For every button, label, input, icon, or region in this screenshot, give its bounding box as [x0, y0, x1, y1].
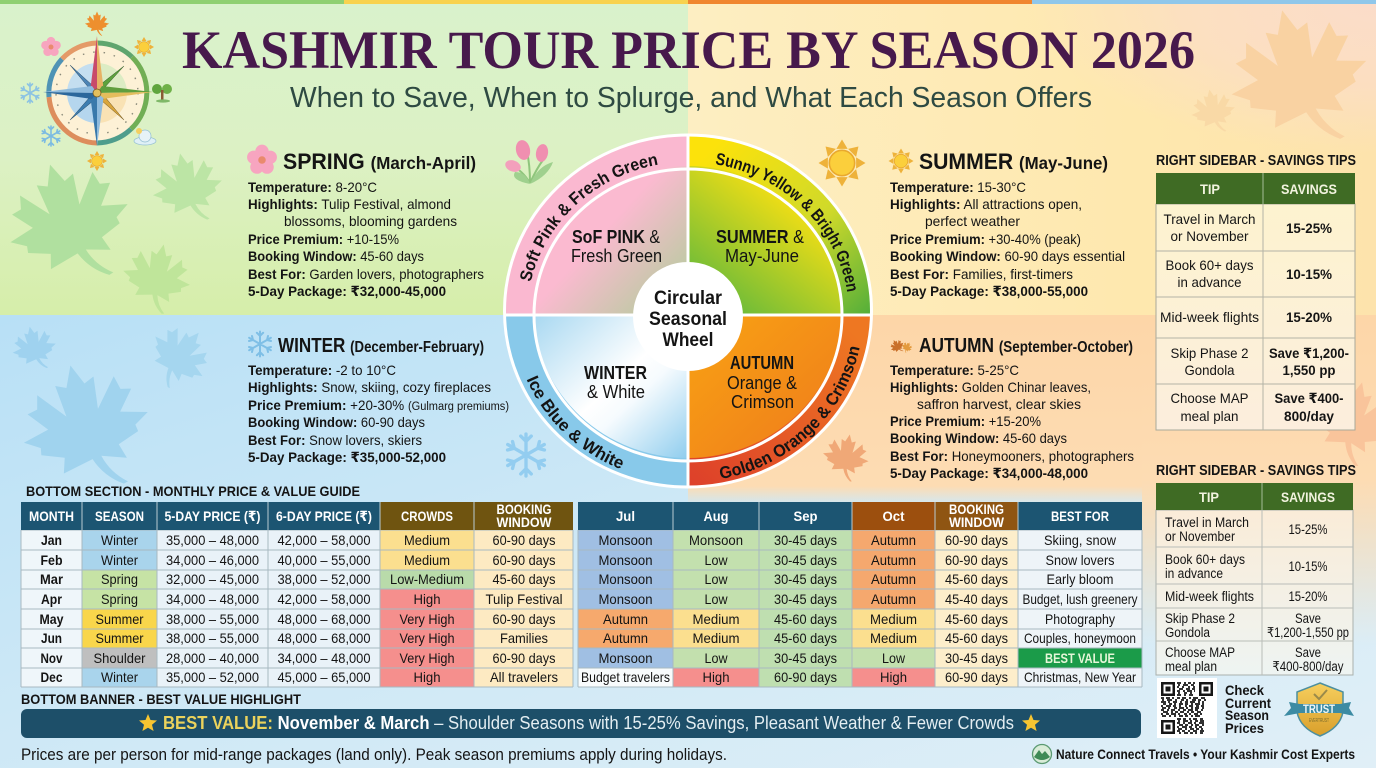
panel: summer: Price Premium: +30-40% (peak) — [890, 231, 1081, 247]
Jul column: Monsoon — [598, 650, 652, 666]
savings values: Save — [1295, 611, 1321, 626]
tip: choose map meal plan — [1170, 390, 1344, 424]
table header: WINDOW — [496, 514, 552, 530]
booking window column: 60-90 days — [945, 552, 1008, 568]
Jul column: Monsoon — [598, 571, 652, 587]
Oct column: Medium — [870, 611, 917, 627]
icon: nature connect logo — [1032, 744, 1052, 764]
tip: skip phase 2 gondola: Skip Phase 2 — [1170, 345, 1249, 361]
summer heading: SUMMER (May-June) — [919, 149, 1108, 174]
Aug column — [689, 532, 743, 685]
table header: Jul — [616, 508, 635, 524]
sidebar table header — [1156, 173, 1355, 204]
tip: choose map meal plan: Choose MAP — [1170, 390, 1248, 406]
tip: mid-week flights: Mid-week flights — [1160, 309, 1259, 325]
Oct column — [870, 532, 917, 685]
5-day price column — [166, 532, 259, 685]
booking window column: 60-90 days — [492, 611, 556, 627]
Sep column: 30-45 days — [774, 650, 837, 666]
Sep column: 45-60 days — [774, 611, 837, 627]
panel: autumn — [887, 335, 1134, 481]
panel: autumn: Best For: Honeymooners, photographers — [890, 448, 1134, 464]
tip: book in advance — [1166, 257, 1333, 290]
title: KASHMIR TOUR PRICE BY SEASON 2026 — [182, 20, 1195, 80]
spring heading: SPRING (March-April) — [283, 149, 476, 174]
Oct column: High — [880, 669, 907, 685]
6-day price column: 42,000 – 58,000 — [278, 591, 371, 607]
5-day price column: 28,000 – 40,000 — [166, 650, 259, 666]
tip rows: meal plan — [1165, 659, 1217, 674]
Jul column: Monsoon — [598, 552, 652, 568]
spring quadrant label — [571, 227, 662, 266]
best for column: BEST VALUE — [1045, 650, 1115, 666]
Aug column: Monsoon — [689, 532, 743, 548]
tip rows — [1165, 515, 1254, 674]
tip: travel in march or november: Travel in March — [1164, 211, 1256, 227]
Oct column: Low — [882, 650, 906, 666]
table: savings tips compact — [1156, 483, 1353, 675]
trust badge: EVERTRUST — [1309, 718, 1329, 724]
tip: travel in march or november — [1164, 211, 1333, 244]
table header: 6-DAY PRICE (₹) — [276, 508, 372, 524]
5-day price column: 35,000 – 52,000 — [166, 669, 259, 685]
panel: spring: Temperature: 8-20°C — [248, 179, 377, 195]
panel: autumn: Temperature: 5-25°C — [890, 362, 1019, 378]
table header: Sep — [794, 508, 818, 524]
booking window column: 45-60 days — [945, 611, 1008, 627]
icon: sun — [818, 140, 866, 186]
season column: Spring — [101, 591, 138, 607]
winter outer ring — [504, 315, 688, 487]
spring quadrant label: Fresh Green — [571, 246, 662, 266]
6-day price column: 40,000 – 55,000 — [278, 552, 371, 568]
season column: Winter — [101, 552, 138, 568]
panel: winter: Best For: Snow lovers, skiers — [248, 432, 422, 448]
Oct column: Autumn — [871, 571, 916, 587]
month column: Apr — [41, 591, 62, 607]
table header: Aug — [704, 508, 728, 524]
tip rows: Book 60+ days — [1165, 552, 1245, 567]
season column — [94, 532, 146, 685]
5-day price column: 38,000 – 55,000 — [166, 630, 259, 646]
autumn quadrant label — [727, 353, 797, 412]
Oct column: Autumn — [871, 552, 916, 568]
booking window column: Families — [500, 630, 548, 646]
spring outer ring — [504, 135, 688, 315]
panel: winter: Highlights: Snow, skiing, cozy fireplaces — [248, 379, 491, 395]
icon: snowflake — [508, 434, 544, 476]
table header: BOOKING — [496, 501, 552, 517]
savings values: 10-15% — [1288, 559, 1328, 574]
sidebar table header: SAVINGS — [1281, 181, 1337, 197]
panel: winter: Temperature: -2 to 10°C — [248, 362, 396, 378]
month column: Mar — [40, 571, 64, 587]
compact table header: SAVINGS — [1281, 489, 1335, 505]
month column: Jan — [41, 532, 62, 548]
tip rows: Skip Phase 2 — [1165, 611, 1235, 626]
tip: skip phase 2 gondola — [1170, 345, 1349, 378]
autumn outer ring — [688, 315, 871, 487]
month column: Feb — [40, 552, 62, 568]
table header: Oct — [882, 508, 905, 524]
summer quadrant label: SUMMER & — [716, 227, 804, 247]
panel: spring: Booking Window: 45-60 days — [248, 248, 424, 264]
panel: summer: Highlights: All attractions open, — [890, 196, 1082, 212]
panel: summer: 5-Day Package: ₹38,000-55,000 — [890, 283, 1088, 299]
wheel hub: Seasonal — [649, 309, 727, 330]
Aug column: Low — [704, 552, 728, 568]
Aug column: Low — [704, 571, 728, 587]
table: monthly prices right — [578, 501, 1142, 687]
winter quadrant label — [584, 363, 647, 402]
compact table header — [1156, 483, 1353, 510]
Jul column: Budget travelers — [581, 669, 670, 685]
Sep column: 45-60 days — [774, 630, 837, 646]
panel: autumn: Highlights: Golden Chinar leaves, — [890, 379, 1091, 395]
Sep column: 30-45 days — [774, 532, 837, 548]
tip rows: Mid-week flights — [1165, 589, 1254, 604]
best for column: Couples, honeymoon — [1024, 630, 1136, 646]
icon: maple leaf — [819, 430, 873, 484]
booking window column: 45-40 days — [945, 591, 1008, 607]
tip: skip phase 2 gondola: Save ₹1,200- — [1269, 345, 1349, 361]
table header: SEASON — [95, 508, 144, 524]
booking window column: 45-60 days — [492, 571, 556, 587]
5-day price column: 34,000 – 46,000 — [166, 552, 259, 568]
crowds column: Very High — [400, 650, 454, 666]
summer inner quadrant — [688, 166, 842, 315]
season column: Spring — [101, 571, 138, 587]
6-day price column: 38,000 – 52,000 — [278, 571, 371, 587]
season column: Summer — [96, 630, 144, 646]
5-day price column: 38,000 – 55,000 — [166, 611, 259, 627]
month column: Nov — [40, 650, 63, 666]
savings values: ₹400-800/day — [1272, 659, 1344, 674]
Oct column: Autumn — [871, 532, 916, 548]
best for column: Snow lovers — [1046, 552, 1114, 568]
best value banner — [21, 709, 1141, 738]
tip: skip phase 2 gondola: 1,550 pp — [1282, 362, 1336, 378]
panel: winter: 5-Day Package: ₹35,000-52,000 — [248, 449, 446, 465]
booking window column: 60-90 days — [492, 552, 556, 568]
table header: BEST FOR — [1051, 508, 1109, 524]
season column: Shoulder — [94, 650, 146, 666]
crowds column: Very High — [400, 611, 454, 627]
crowds column: Low-Medium — [390, 571, 464, 587]
Jul column: Monsoon — [598, 532, 652, 548]
month column: Dec — [40, 669, 63, 685]
tip: book in advance: in advance — [1178, 274, 1242, 290]
table header — [21, 501, 573, 530]
best for column: Christmas, New Year — [1024, 669, 1136, 685]
booking window column — [945, 532, 1008, 685]
table header: BOOKING — [949, 501, 1004, 517]
table: monthly prices left — [21, 501, 573, 687]
ring label: sunny yellow and bright green: Sunny Yellow & Bright Green — [716, 153, 856, 292]
booking window column — [486, 532, 562, 685]
panel: winter: Booking Window: 60-90 days — [248, 414, 425, 430]
crowds column: High — [414, 669, 440, 685]
call to action: check current season prices — [1225, 682, 1271, 736]
panel: autumn: Price Premium: +15-20% — [890, 413, 1041, 429]
booking window column: 60-90 days — [492, 650, 556, 666]
call to action: check current season prices: Current — [1225, 695, 1271, 711]
tip: choose map meal plan: 800/day — [1284, 408, 1334, 424]
6-day price column: 48,000 – 68,000 — [278, 630, 371, 646]
booking window column: 60-90 days — [492, 532, 556, 548]
5-day price column: 32,000 – 45,000 — [166, 571, 259, 587]
Sep column: 30-45 days — [774, 591, 837, 607]
panel: autumn: Booking Window: 45-60 days — [890, 430, 1067, 446]
Jul column — [581, 532, 670, 685]
crowds column: Medium — [404, 552, 450, 568]
Aug column: Low — [704, 650, 728, 666]
table header — [578, 501, 1142, 530]
panel: autumn: saffron harvest, clear skies — [917, 396, 1081, 412]
panel: spring: blossoms, blooming gardens — [284, 213, 457, 229]
icon: seasonal compass rose — [21, 12, 172, 171]
icon: star left — [139, 714, 157, 731]
summer quadrant label: May-June — [725, 246, 799, 266]
best for column: Budget, lush greenery — [1022, 591, 1138, 607]
autumn quadrant label: AUTUMN — [730, 353, 794, 373]
trust badge: TRUST — [1303, 702, 1336, 716]
tip rows: Travel in March — [1165, 515, 1249, 530]
panel: autumn: 5-Day Package: ₹34,000-48,000 — [890, 465, 1088, 481]
icon: star right — [1022, 714, 1040, 731]
tip rows: Choose MAP — [1165, 645, 1235, 660]
month column: May — [40, 611, 64, 627]
6-day price column: 45,000 – 65,000 — [278, 669, 371, 685]
panel: spring — [247, 145, 484, 299]
savings values — [1267, 522, 1349, 674]
subtitle: When to Save, When to Splurge, and What Each Season Offers — [290, 82, 1092, 114]
icon: autumn leaves — [887, 337, 914, 356]
call to action: check current season prices: Season — [1225, 707, 1269, 723]
Sep column — [774, 532, 837, 685]
ring label: ice blue and white: Ice Blue & White — [526, 375, 623, 468]
footnote: Prices are per person for mid-range packages (land only). Peak season premiums apply during holidays. — [21, 745, 727, 764]
Aug column: Medium — [692, 630, 740, 646]
tip rows: or November — [1165, 529, 1235, 544]
panel: spring: Highlights: Tulip Festival, almond — [248, 196, 451, 212]
panel: winter — [248, 332, 509, 465]
tip: choose map meal plan: Save ₹400- — [1274, 390, 1344, 406]
Oct column: Autumn — [871, 591, 916, 607]
spring inner quadrant — [534, 166, 688, 315]
panel: spring: Best For: Garden lovers, photographers — [248, 266, 484, 282]
best for column: Photography — [1045, 611, 1115, 627]
crowds column: High — [414, 591, 440, 607]
month column — [40, 532, 64, 685]
winter quadrant label: & White — [587, 382, 645, 402]
best for column: Early bloom — [1046, 571, 1114, 587]
qr code — [1157, 678, 1217, 738]
section heading: best value banner: BOTTOM BANNER - BEST VALUE HIGHLIGHT — [21, 691, 301, 707]
6-day price column — [278, 532, 371, 685]
Sep column: 30-45 days — [774, 552, 837, 568]
circular seasonal wheel — [503, 134, 873, 488]
ring label: golden orange and crimson: Golden Orange & Crimson — [720, 346, 860, 478]
booking window column: Tulip Festival — [486, 591, 562, 607]
Sep column: 30-45 days — [774, 571, 837, 587]
booking window column: 60-90 days — [945, 532, 1008, 548]
autumn inner quadrant — [688, 315, 842, 458]
Aug column: High — [702, 669, 730, 685]
Jul column: Autumn — [603, 630, 648, 646]
Aug column: Medium — [692, 611, 740, 627]
wheel hub: Circular — [654, 288, 723, 309]
compact table header: TIP — [1199, 489, 1219, 505]
icon: spring blossom — [247, 145, 277, 174]
banner text: BEST VALUE: November & March – Shoulder Seasons with 15-25% Savings, Pleasant Weather & Fewer Crowds — [163, 713, 1014, 733]
Jul column: Autumn — [603, 611, 648, 627]
table header: 5-DAY PRICE (₹) — [164, 508, 260, 524]
month column: Jun — [41, 630, 62, 646]
season column: Winter — [101, 532, 138, 548]
trust badge — [1284, 683, 1354, 736]
savings values: ₹1,200-1,550 pp — [1267, 625, 1349, 640]
booking window column: 60-90 days — [945, 669, 1008, 685]
autumn heading: AUTUMN (September-October) — [919, 335, 1133, 357]
savings values: 15-20% — [1288, 589, 1328, 604]
Jul column: Monsoon — [598, 591, 652, 607]
winter heading: WINTER (December-February) — [278, 335, 484, 357]
panel: spring: Price Premium: +10-15% — [248, 231, 399, 247]
savings values: 15-25% — [1288, 522, 1328, 537]
table: savings tips — [1156, 173, 1355, 430]
tip: choose map meal plan: meal plan — [1180, 408, 1238, 424]
autumn quadrant label: Crimson — [731, 392, 794, 412]
summer outer ring — [688, 135, 871, 315]
panel: winter: Price Premium: +20-30% (Gulmarg premiums) — [248, 397, 509, 413]
section heading: monthly guide: BOTTOM SECTION - MONTHLY PRICE & VALUE GUIDE — [26, 483, 360, 499]
panel: summer: Best For: Families, first-timers — [890, 266, 1073, 282]
booking window column: All travelers — [490, 669, 558, 685]
crowds column — [390, 532, 464, 685]
savings values: Save — [1295, 645, 1321, 660]
Sep column: 60-90 days — [774, 669, 837, 685]
booking window column: 45-60 days — [945, 630, 1008, 646]
tip: book in advance: Book 60+ days — [1166, 257, 1254, 273]
spring quadrant label: SoF PINK & — [572, 227, 660, 247]
season column: Summer — [96, 611, 144, 627]
autumn quadrant label: Orange & — [727, 373, 797, 393]
6-day price column: 48,000 – 68,000 — [278, 611, 371, 627]
ring label: soft pink and fresh green: Soft Pink & Fresh Green — [520, 156, 658, 281]
5-day price column: 34,000 – 48,000 — [166, 591, 259, 607]
season column: Winter — [101, 669, 138, 685]
table header: MONTH — [29, 508, 74, 524]
6-day price column: 34,000 – 48,000 — [278, 650, 371, 666]
table header: CROWDS — [401, 508, 453, 524]
winter quadrant label: WINTER — [584, 363, 647, 383]
decorative background leaves — [0, 0, 1376, 505]
tip: book in advance: 10-15% — [1286, 266, 1333, 282]
panel: spring: 5-Day Package: ₹32,000-45,000 — [248, 283, 446, 299]
panel: summer — [888, 148, 1125, 299]
tip: mid-week flights: 15-20% — [1286, 309, 1333, 325]
call to action: check current season prices: Check — [1225, 682, 1264, 698]
Oct column: Medium — [870, 630, 917, 646]
icon: winter snowflake — [249, 332, 271, 356]
crowds column: Medium — [404, 532, 450, 548]
booking window column: 30-45 days — [945, 650, 1008, 666]
panel: summer: Temperature: 15-30°C — [890, 179, 1026, 195]
best for column — [1018, 532, 1142, 685]
tip rows: in advance — [1165, 566, 1223, 581]
wheel hub: Wheel — [662, 330, 714, 351]
icon: summer sun — [888, 148, 914, 174]
booking window column: 45-60 days — [945, 571, 1008, 587]
tip rows: Gondola — [1165, 625, 1210, 640]
tip: travel in march or november: 15-25% — [1286, 220, 1333, 236]
crowds column: Very High — [400, 630, 454, 646]
best for column: Skiing, snow — [1044, 532, 1117, 548]
wheel hub — [633, 262, 743, 371]
tip: skip phase 2 gondola: Gondola — [1184, 362, 1235, 378]
winter inner quadrant — [534, 315, 688, 458]
call to action: check current season prices: Prices — [1225, 720, 1264, 736]
icon: tulips — [504, 139, 553, 184]
summer quadrant label — [716, 227, 804, 266]
panel: summer: Booking Window: 60-90 days essential — [890, 248, 1125, 264]
sidebar table header: TIP — [1200, 181, 1220, 197]
6-day price column: 42,000 – 58,000 — [278, 532, 371, 548]
Aug column: Low — [704, 591, 728, 607]
table header: WINDOW — [949, 514, 1005, 530]
tip: mid-week flights — [1160, 309, 1333, 325]
tip: travel in march or november: or November — [1170, 228, 1249, 244]
5-day price column: 35,000 – 48,000 — [166, 532, 259, 548]
panel: summer: perfect weather — [925, 213, 1020, 229]
